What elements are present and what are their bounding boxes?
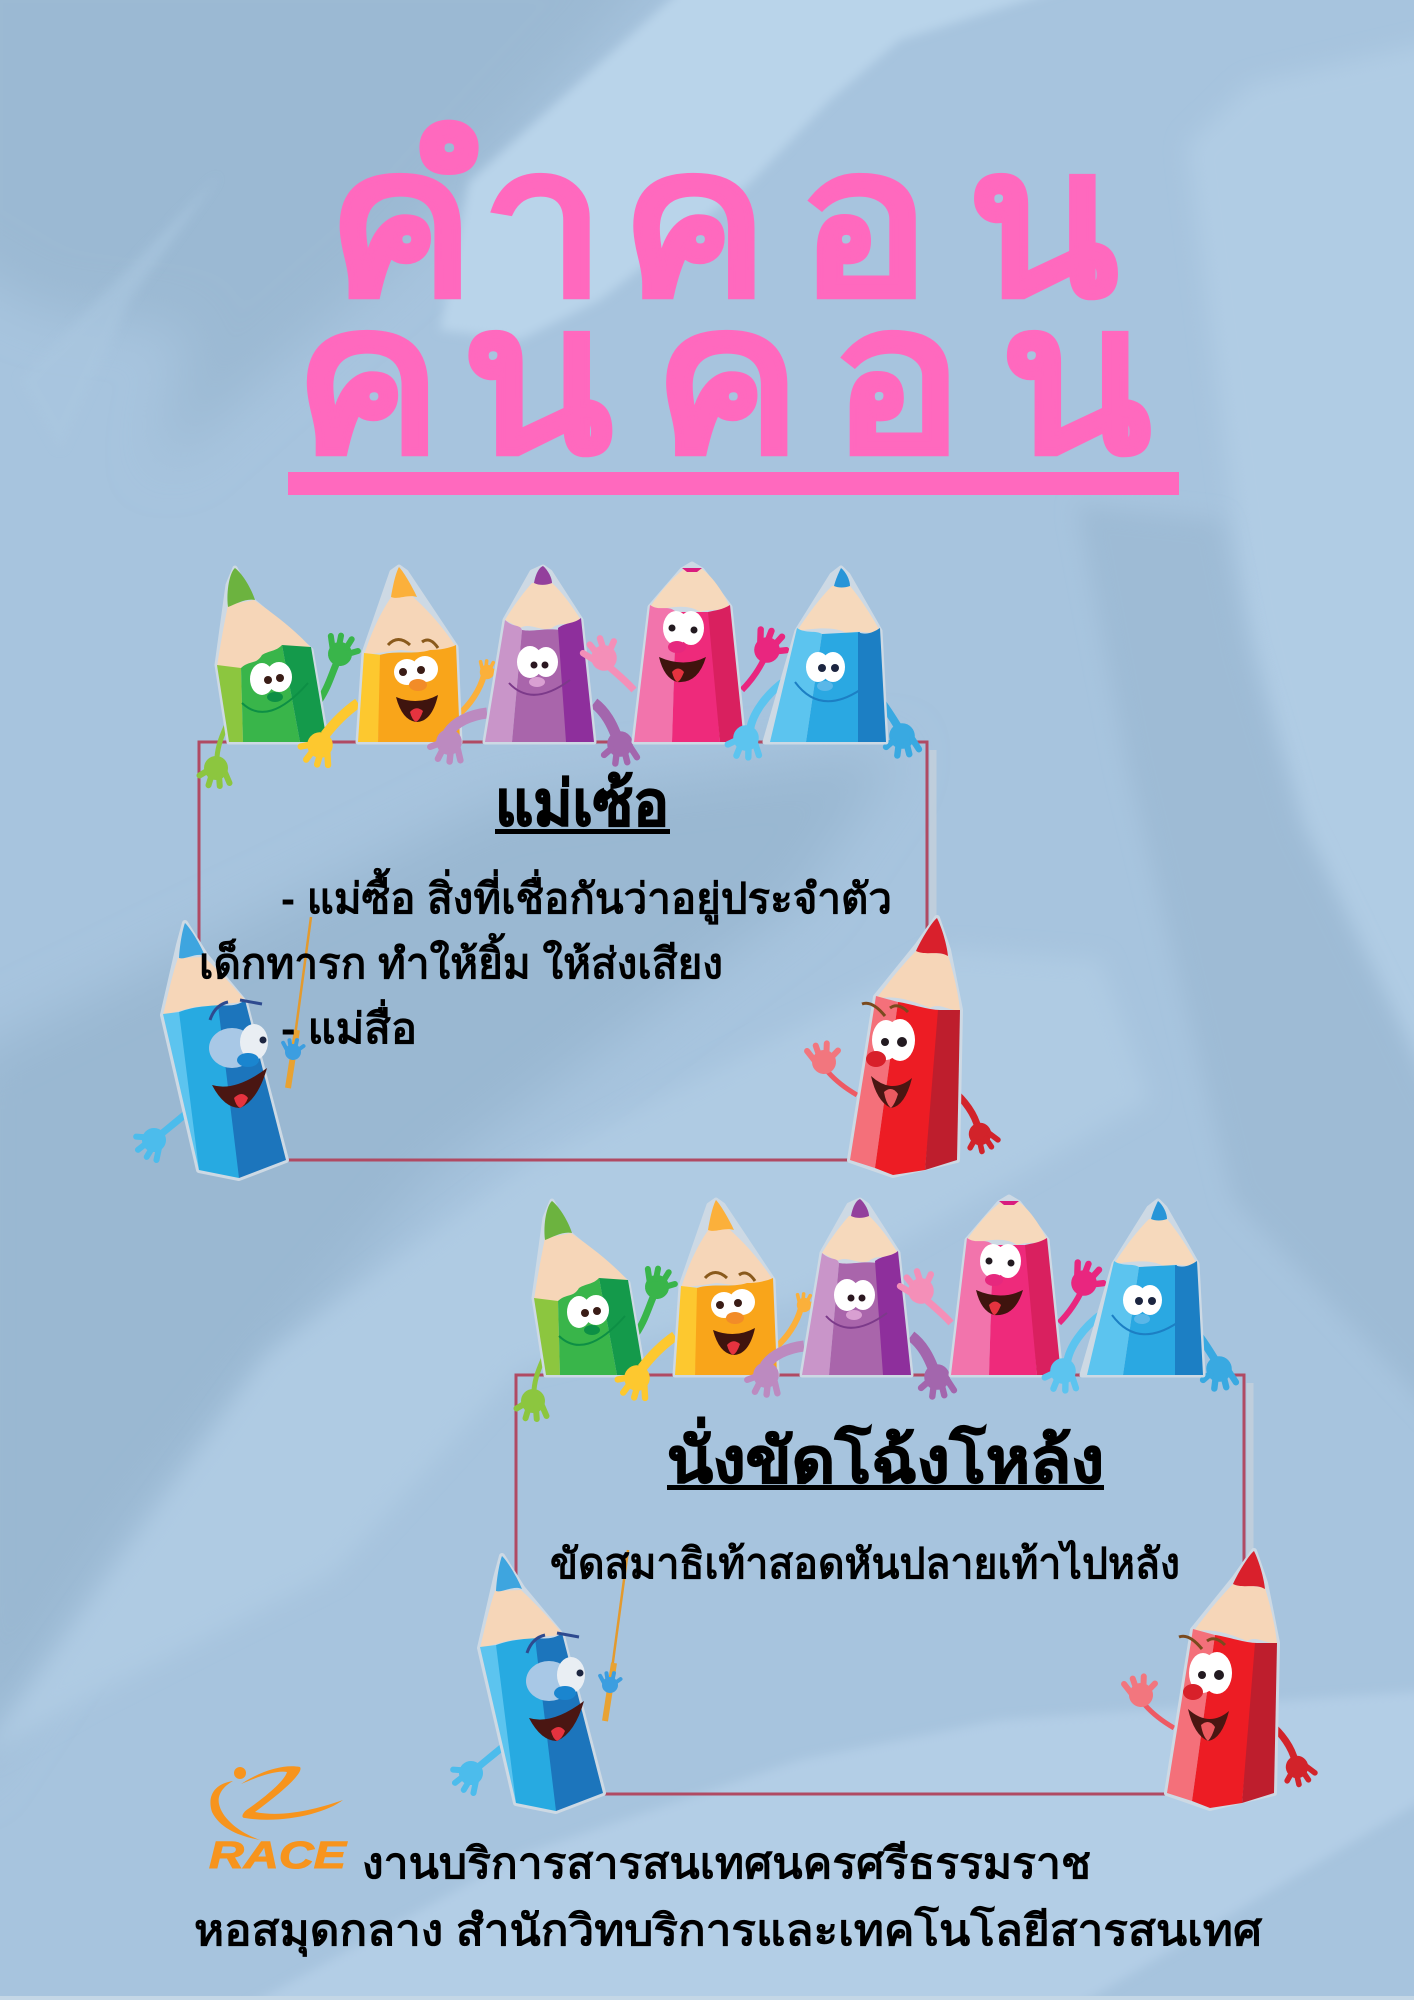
title underline	[288, 472, 1179, 495]
panel heading: นั่งขัดโฉ้งโหล้ง	[667, 1417, 1104, 1496]
title: คำคอน คนคอน	[288, 105, 1179, 497]
pencil characters top row	[200, 564, 920, 786]
panel heading: แม่เซ้อ	[495, 771, 669, 839]
footer text	[194, 1840, 1263, 1958]
footer text: หอสมุดกลาง สำนักวิทบริการและเทคโนโลยีสารสนเทศ	[194, 1904, 1263, 1958]
panel body text: ขัดสมาธิเท้าสอดหันปลายเท้าไปหลัง	[550, 1539, 1180, 1587]
panel body text: - แม่ซื้อ สิ่งที่เชื่อกันว่าอยู่ประจำตัว	[281, 867, 892, 925]
panel: นั่งขัดโฉ้งโหล้ง	[447, 1197, 1316, 1811]
panel frame	[199, 742, 933, 1160]
panel body text	[199, 867, 892, 1052]
pencil characters top row	[516, 1197, 1237, 1419]
title line 2: คนคอน	[294, 262, 1152, 497]
panel: แม่เซ้อ	[130, 564, 999, 1178]
panel frame	[516, 1375, 1250, 1794]
title line 1: คำคอน	[326, 105, 1119, 340]
blue pencil with pointer	[130, 917, 311, 1178]
logo: RACE: RACE	[209, 1835, 348, 1877]
panel body text: เด็กทารก ทำให้ยิ้ม ให้ส่งเสียง	[199, 932, 723, 987]
footer text: งานบริการสารสนเทศนครศรีธรรมราช	[362, 1840, 1091, 1888]
logo: RACE	[209, 1766, 348, 1877]
panel body text: - แม่สื่อ	[281, 999, 417, 1052]
red pencil waving	[806, 918, 999, 1175]
red pencil waving	[1123, 1551, 1316, 1808]
blue pencil with pointer	[447, 1550, 628, 1811]
